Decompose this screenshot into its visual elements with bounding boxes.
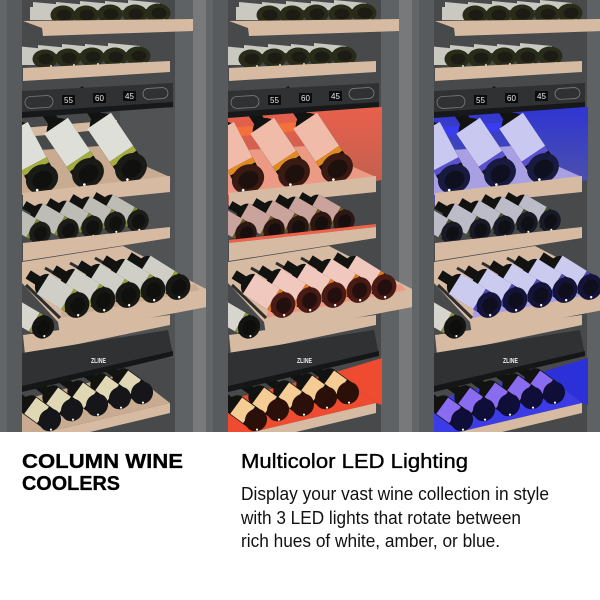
pull-out bottles <box>227 245 401 323</box>
display 45: 45 <box>331 92 340 101</box>
title: column wine coolers: COLUMN WINE <box>22 451 183 473</box>
top bottle row <box>442 0 582 24</box>
third shelf top <box>434 146 582 195</box>
ZLINE drawer: ZLINE <box>91 358 106 365</box>
ZLINE drawer: ZLINE <box>503 358 518 365</box>
fourth bottle row <box>403 186 565 248</box>
pull-out lit strip <box>60 284 200 318</box>
display 55 <box>268 95 281 105</box>
third shelf front <box>229 176 376 207</box>
display 60: 60 <box>95 94 104 103</box>
body text: Display your vast wine collection in style <box>241 484 549 504</box>
fourth shelf glow edge <box>229 224 376 243</box>
body text <box>240 484 549 551</box>
photo: three wine coolers <box>0 0 600 436</box>
title: column wine coolers: COOLERS <box>22 473 120 495</box>
second bottle row <box>15 43 150 68</box>
control panel <box>434 83 585 116</box>
top shelf <box>23 19 193 36</box>
second shelf <box>229 61 376 81</box>
left button pill <box>437 95 465 109</box>
third shelf top <box>22 146 170 195</box>
third shelf top <box>228 146 376 195</box>
bottom shelf top <box>434 372 582 432</box>
tray slats <box>438 258 537 318</box>
rear shelf bar <box>434 120 529 137</box>
tray slats <box>232 258 331 318</box>
second bottle row <box>221 43 356 68</box>
blue glow under drawer <box>542 358 588 405</box>
left button pill <box>231 95 259 109</box>
body text: rich hues of white, amber, or blue. <box>241 531 500 551</box>
display 45 <box>123 91 136 101</box>
lower single bottle <box>22 302 54 339</box>
display 60 <box>93 93 106 103</box>
panel lower edge <box>22 102 173 118</box>
panel lower edge <box>434 102 585 118</box>
heading: multicolor LED lighting: Multicolor LED Lighting <box>241 451 468 473</box>
fifth shelf <box>23 315 170 355</box>
display 45 <box>535 91 548 101</box>
second shelf <box>23 61 170 81</box>
right button pill <box>555 87 580 100</box>
panel lower edge <box>228 102 379 118</box>
ZLINE drawer <box>228 330 379 392</box>
pull-out lit strip <box>266 284 406 318</box>
display 60 <box>299 93 312 103</box>
second shelf <box>435 61 582 81</box>
control panel <box>228 83 379 116</box>
display 45 <box>329 91 342 101</box>
top bottle row <box>30 0 170 21</box>
ZLINE drawer <box>22 330 173 392</box>
ZLINE drawer <box>434 330 585 392</box>
control panel <box>22 83 173 112</box>
display 60: 60 <box>507 94 516 103</box>
display 60 <box>505 93 518 103</box>
large bottles <box>395 80 565 199</box>
column 2: amber lighting <box>206 0 412 432</box>
fourth bottle row <box>197 186 359 248</box>
pull-out lit strip <box>472 284 600 318</box>
fourth shelf <box>23 227 170 261</box>
pull-out bottles <box>26 252 190 318</box>
right button pill <box>349 87 374 100</box>
top shelf <box>435 19 600 36</box>
rear shelf bar <box>237 120 323 136</box>
bottom bottles <box>214 358 364 436</box>
large bottles <box>22 86 147 192</box>
amber wall glow <box>228 107 382 205</box>
pull-out shelf <box>22 246 212 335</box>
left button pill <box>25 95 53 109</box>
tray slats <box>25 256 104 320</box>
lower single bottle <box>198 291 264 343</box>
bottom shelf front <box>47 403 170 432</box>
display 55 <box>474 95 487 105</box>
pull-out shelf <box>434 246 600 335</box>
amber glow under drawer <box>336 358 382 405</box>
display 55: 55 <box>64 96 73 105</box>
fourth shelf <box>435 227 582 261</box>
top shelf <box>229 19 399 36</box>
blue wall glow <box>434 107 588 205</box>
lower single bottle <box>404 291 470 343</box>
pull-out bottles <box>433 245 600 323</box>
pull-out shelf <box>228 246 418 335</box>
bottom shelf front <box>459 403 582 432</box>
rear shelf bar <box>30 120 117 136</box>
title: column wine coolers <box>22 451 183 495</box>
display 45: 45 <box>537 92 546 101</box>
body text: with 3 LED lights that rotate between <box>240 508 521 528</box>
ZLINE drawer: ZLINE <box>297 358 312 365</box>
fourth bottle row <box>22 192 149 242</box>
second bottle row <box>427 43 562 68</box>
bottom shelf top <box>22 372 170 432</box>
display 45: 45 <box>125 92 134 101</box>
right button pill <box>143 87 168 100</box>
display 55 <box>62 95 75 105</box>
bottom bottles <box>22 368 154 432</box>
fifth shelf <box>435 315 582 355</box>
display 55: 55 <box>270 96 279 105</box>
column 1: white lighting <box>22 0 206 432</box>
third shelf front <box>23 176 170 207</box>
display 60: 60 <box>301 94 310 103</box>
column 3: blue lighting <box>395 0 600 436</box>
fourth shelf <box>229 227 376 261</box>
display 55: 55 <box>476 96 485 105</box>
bottom shelf front <box>253 403 376 432</box>
fifth shelf <box>229 315 376 355</box>
bottom shelf top <box>228 372 376 432</box>
third shelf front <box>435 176 582 207</box>
top bottle row <box>236 0 376 21</box>
bottom bottles <box>420 358 570 436</box>
large bottles <box>228 86 353 192</box>
